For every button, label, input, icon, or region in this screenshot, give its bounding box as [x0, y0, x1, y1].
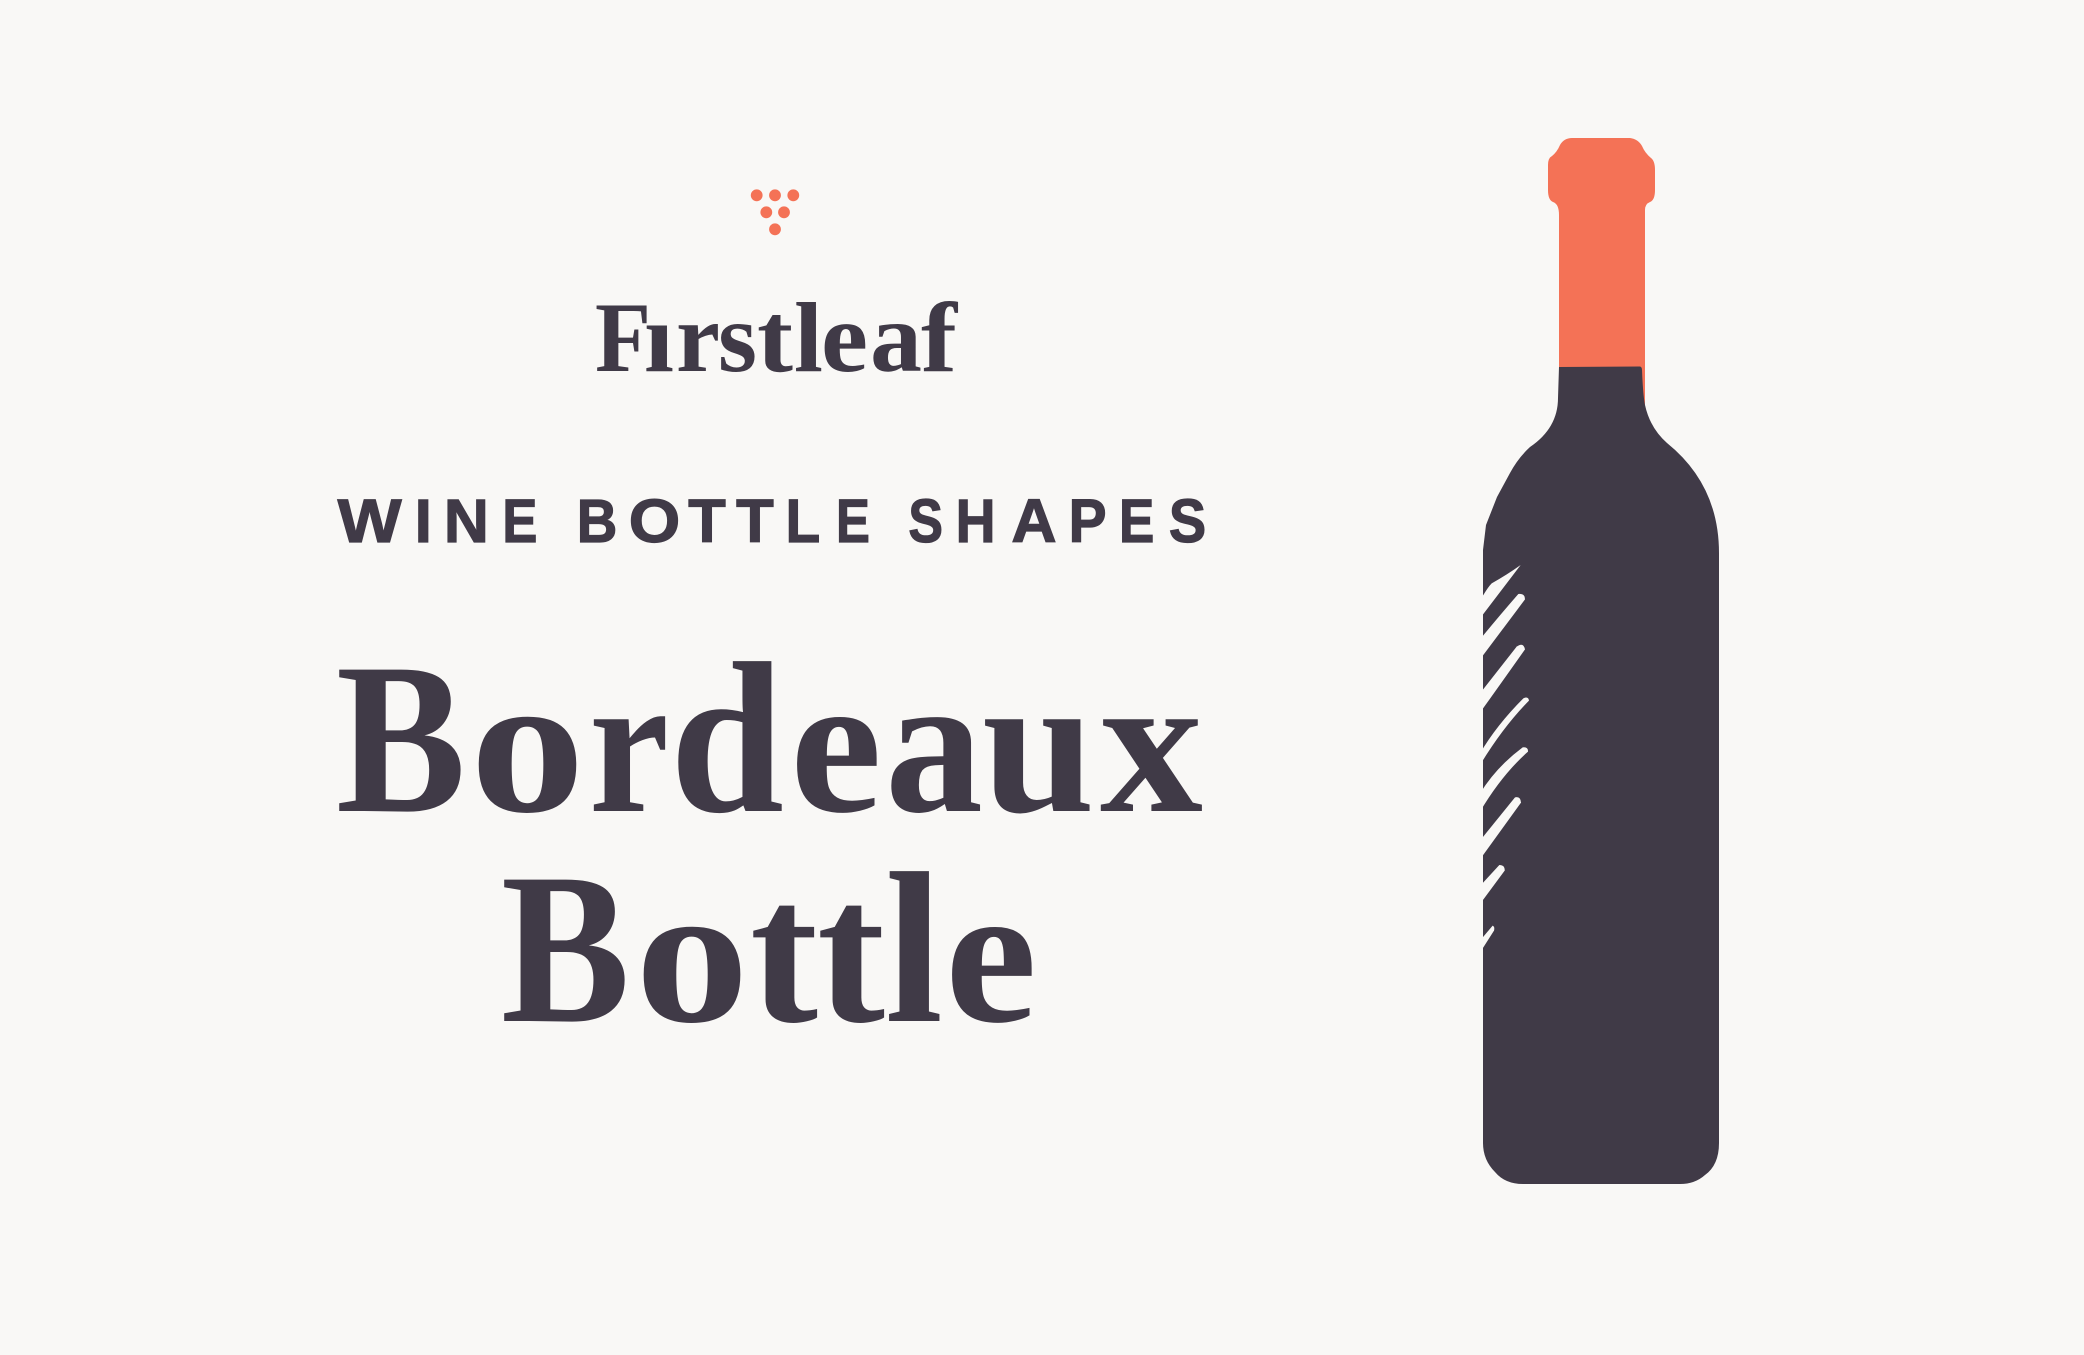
subtitle: T [736, 487, 774, 555]
title: o [470, 634, 585, 855]
title: B [501, 829, 630, 1068]
subtitle: S [908, 487, 943, 555]
subtitle: L [786, 487, 820, 555]
subtitle: B [577, 487, 617, 555]
title: d [670, 619, 784, 858]
title: e [945, 844, 1037, 1065]
subtitle: E [1119, 487, 1154, 555]
bottle capsule [1548, 138, 1655, 410]
icon: grape cluster logo [751, 189, 799, 235]
title: l [885, 829, 943, 1068]
subtitle: H [956, 487, 996, 555]
title: t [750, 839, 818, 1066]
brand name: s [718, 282, 757, 393]
title: r [589, 634, 669, 855]
brand name: i [644, 282, 674, 393]
bottle body [1483, 366, 1719, 1184]
subtitle: W [338, 487, 402, 555]
title [336, 619, 1203, 1068]
brand name: r [676, 282, 720, 393]
brand name: f [921, 282, 959, 393]
title: B [336, 619, 466, 858]
title: o [635, 844, 749, 1065]
brand name: l [794, 282, 823, 393]
title: t [817, 839, 885, 1066]
title: e [790, 634, 882, 855]
brand name: a [870, 282, 922, 393]
brand name: e [821, 282, 868, 393]
subtitle: A [1011, 487, 1057, 555]
icon: Bordeaux bottle [1480, 138, 1719, 1184]
title: u [982, 634, 1095, 855]
brand name: F [595, 282, 651, 393]
subtitle: S [1169, 487, 1206, 555]
subtitle: I [415, 487, 432, 555]
subtitle: E [836, 487, 870, 555]
bottle label brush strokes [1480, 565, 1529, 953]
subtitle: P [1069, 487, 1106, 555]
subtitle: T [688, 487, 726, 555]
title: a [885, 634, 983, 855]
subtitle: E [502, 487, 537, 555]
brand name: t [757, 282, 793, 393]
subtitle: O [629, 487, 680, 555]
title: x [1100, 634, 1203, 855]
subtitle: N [444, 487, 489, 555]
